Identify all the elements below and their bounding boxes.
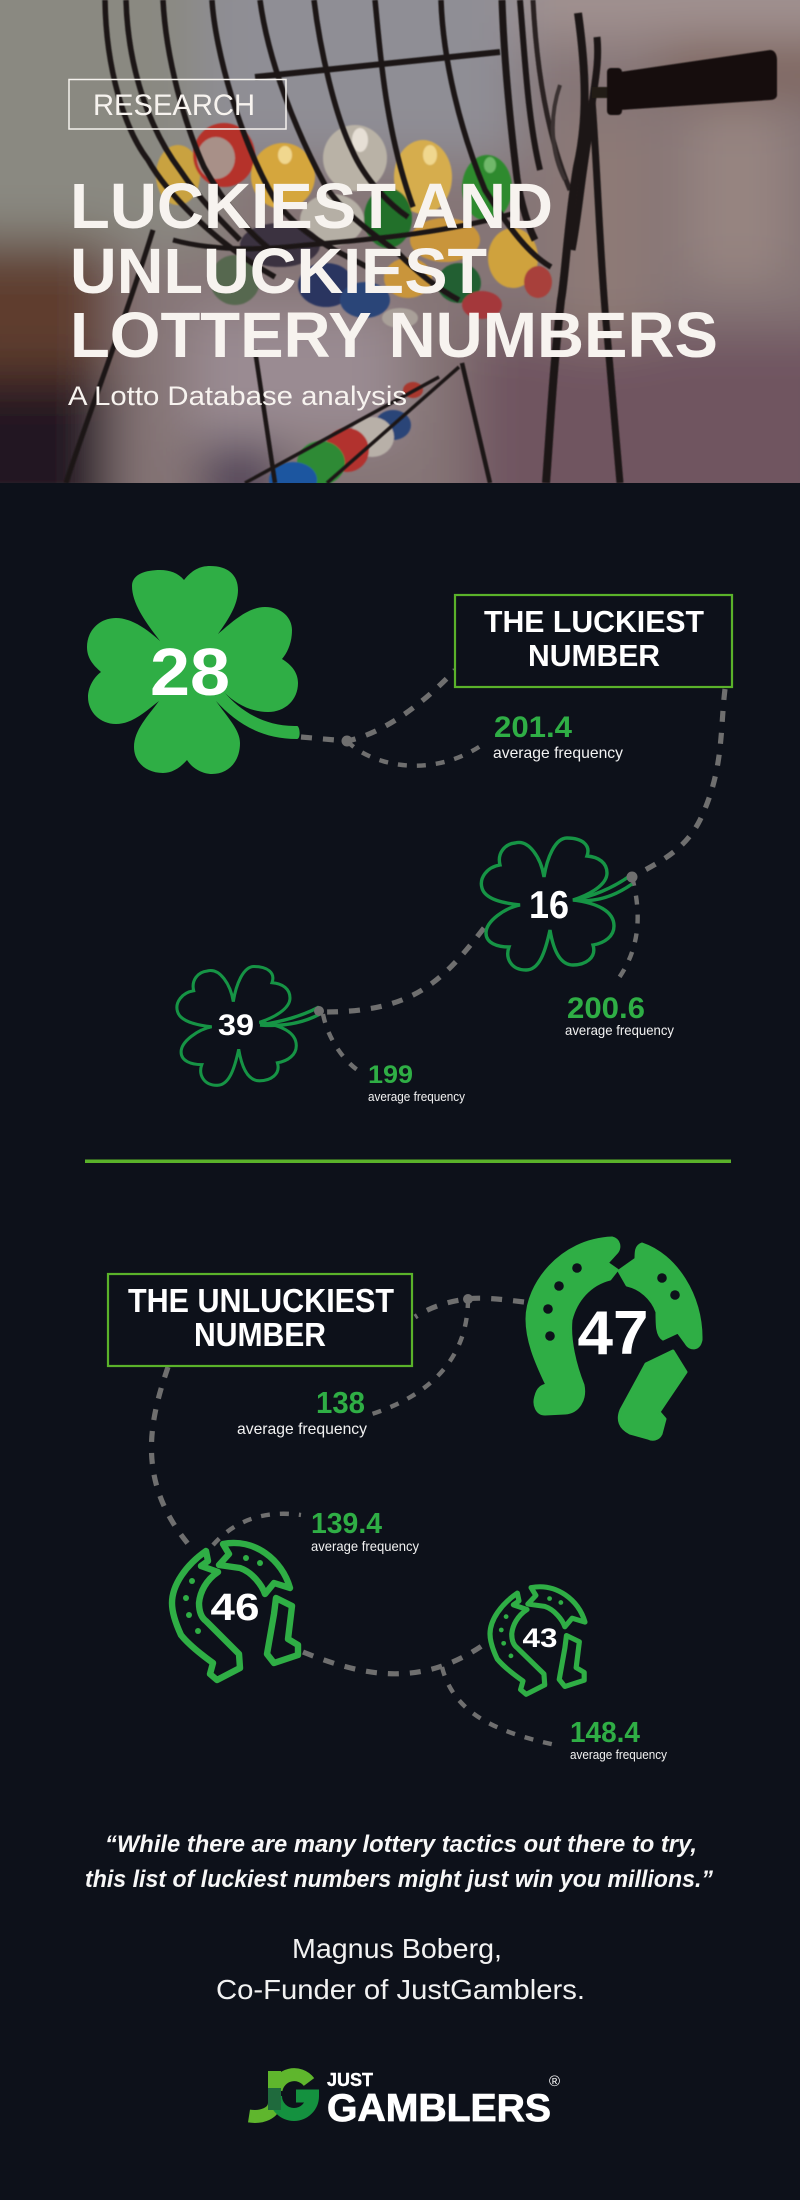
icon: outline horseshoe 43 [490, 1587, 585, 1694]
title: UNLUCKIEST [70, 235, 487, 307]
icon: outline clover 16 [481, 838, 638, 970]
logo: just gamblers: ® [549, 2073, 560, 2090]
stat: 200.6: average frequency [565, 1022, 674, 1038]
label: the luckiest number: NUMBER [528, 638, 660, 673]
label: the luckiest number [455, 595, 732, 687]
stat: 199: average frequency [368, 1090, 466, 1104]
stat: 138: average frequency [237, 1421, 367, 1438]
number 43: 43 [522, 1623, 558, 1653]
stat: 138: 138 [316, 1385, 365, 1420]
tag: research: RESEARCH [93, 89, 255, 122]
quote: “While there are many lottery tactics out there to try, [105, 1831, 697, 1858]
number 47: 47 [578, 1299, 648, 1368]
logo: just gamblers: JUST [327, 2070, 373, 2090]
stat: 200.6: 200.6 [567, 992, 645, 1025]
stat: 148.4 [570, 1717, 667, 1762]
stat: 148.4: 148.4 [570, 1717, 640, 1749]
tag: research [69, 80, 286, 129]
number 16: 16 [529, 884, 569, 927]
stat: 199: 199 [368, 1061, 413, 1089]
number 28: 28 [150, 635, 230, 710]
attribution [216, 1933, 585, 2005]
icon: solid clover 28 [87, 566, 300, 774]
handle [592, 50, 777, 115]
quote: this list of luckiest numbers might just win you millions.” [85, 1866, 713, 1893]
logo: just gamblers: GAMBLERS [327, 2087, 551, 2130]
attribution: Magnus Boberg, [292, 1933, 502, 1964]
stat: 139.4: 139.4 [311, 1508, 382, 1540]
stat: 201.4: 201.4 [494, 711, 572, 744]
stat: 199 [368, 1061, 466, 1104]
label: the luckiest number: THE LUCKIEST [484, 604, 704, 639]
title [70, 170, 718, 371]
connector: unluckiest [151, 1294, 560, 1746]
balls [156, 123, 552, 498]
title: LUCKIEST AND [70, 170, 553, 242]
icon: outline horseshoe 46 [172, 1543, 298, 1680]
icon: outline clover 39 [177, 966, 324, 1085]
stat: 148.4: average frequency [570, 1747, 667, 1762]
subtitle: A Lotto Database analysis [68, 381, 407, 411]
title: LOTTERY NUMBERS [70, 299, 718, 371]
logo: just gamblers [249, 2070, 560, 2130]
stat: 200.6 [565, 992, 674, 1038]
number 46: 46 [210, 1587, 260, 1629]
quote [85, 1831, 713, 1893]
hero photo: lottery cage [0, 0, 800, 483]
stat: 139.4 [311, 1508, 419, 1554]
connector: luckiest [301, 670, 725, 1071]
stat: 138 [237, 1385, 367, 1438]
icon: solid horseshoe 47 [527, 1238, 701, 1439]
stat: 139.4: average frequency [311, 1538, 419, 1554]
label: the unluckiest number: NUMBER [194, 1316, 326, 1353]
icon: JG mark [249, 2071, 312, 2116]
attribution: Co-Funder of JustGamblers. [216, 1974, 585, 2005]
number 39: 39 [218, 1009, 254, 1042]
cage wires [66, 0, 620, 483]
label: the unluckiest number [108, 1274, 412, 1366]
stat: 201.4: average frequency [493, 745, 623, 762]
stat: 201.4 [493, 711, 623, 762]
label: the unluckiest number: THE UNLUCKIEST [128, 1282, 394, 1319]
